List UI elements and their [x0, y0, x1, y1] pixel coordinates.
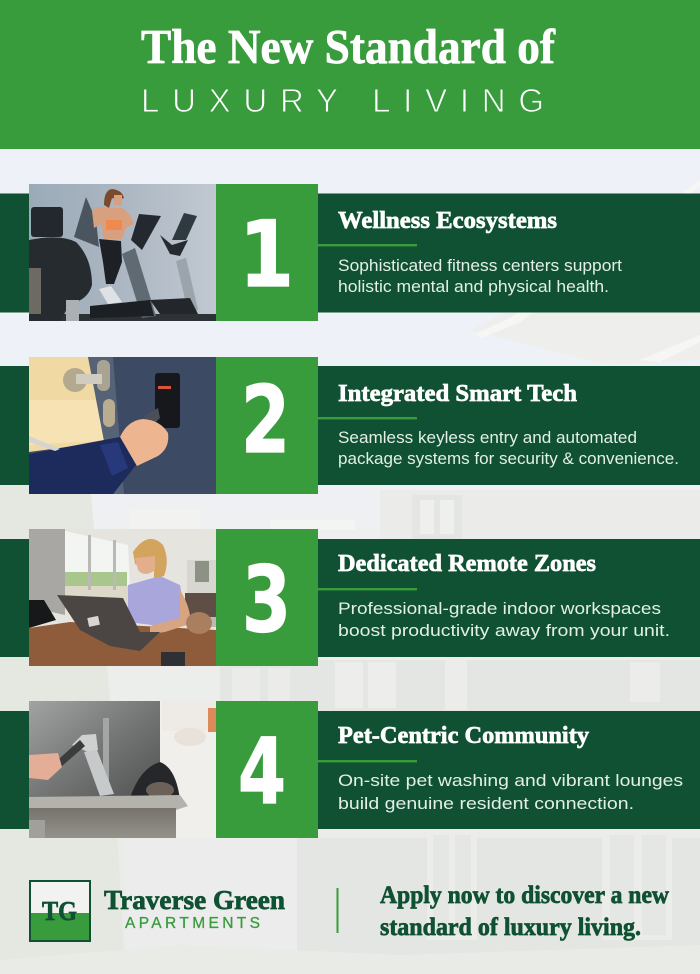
number box 2: [216, 357, 318, 494]
panel: item 1 wellness: [0, 184, 700, 321]
body 4: build genuine resident connection.: [338, 795, 634, 813]
body 2: package systems for security & convenience.: [338, 450, 679, 468]
divider: [336, 888, 338, 933]
dark bar 4: [0, 711, 700, 829]
logo: Traverse Green Apartments: [30, 881, 285, 941]
rule 2: [318, 417, 417, 419]
rule 3: [318, 588, 417, 590]
body 3: boost productivity away from your unit.: [338, 622, 670, 640]
dark bar 3: [0, 539, 700, 657]
photo: woman on elliptical: [29, 184, 216, 321]
subtitle: Luxury Living: LUXURY LIVING: [141, 82, 544, 119]
logo badge TG: TG: [42, 896, 77, 926]
body 2: Seamless keyless entry and automated: [338, 429, 637, 447]
rule 4: [318, 760, 417, 762]
dark bar 2: [0, 366, 700, 485]
heading 3: Dedicated Remote Zones: [338, 550, 596, 577]
number 4: 4: [238, 720, 286, 825]
dark bar 1: [0, 194, 700, 312]
logo badge TG: [30, 881, 90, 941]
header band: [0, 0, 700, 149]
number box 3: [216, 529, 318, 666]
call to action: standard of luxury living.: [380, 914, 641, 941]
brand name: Traverse Green: [104, 885, 285, 915]
number 2: 2: [241, 366, 290, 474]
title: The New Standard of: The New Standard of: [141, 19, 556, 74]
body 3: Professional-grade indoor workspaces: [338, 600, 661, 618]
call to action: Apply now to discover a new: [380, 882, 669, 909]
body 1: holistic mental and physical health.: [338, 278, 609, 296]
brand sub-label: APARTMENTS: [125, 915, 260, 932]
photo: dog washing: [29, 701, 216, 838]
heading 2: Integrated Smart Tech: [338, 380, 577, 407]
number box 4: [216, 701, 318, 838]
heading 4: Pet-Centric Community: [338, 722, 590, 749]
number box 1: [216, 184, 318, 321]
panel: item 4 pet community: [0, 701, 700, 838]
photo: keyless door entry: [29, 357, 216, 494]
number 1: 1: [239, 203, 294, 308]
number 3: 3: [242, 548, 291, 653]
panel: item 3 remote zones: [0, 529, 700, 666]
rule 1: [318, 244, 417, 246]
panel: item 2 smart tech: [0, 357, 700, 494]
photo: woman at laptop: [29, 529, 216, 666]
body 4: On-site pet washing and vibrant lounges: [338, 772, 683, 790]
body 1: Sophisticated fitness centers support: [338, 257, 622, 275]
heading 1: Wellness Ecosystems: [338, 207, 557, 234]
